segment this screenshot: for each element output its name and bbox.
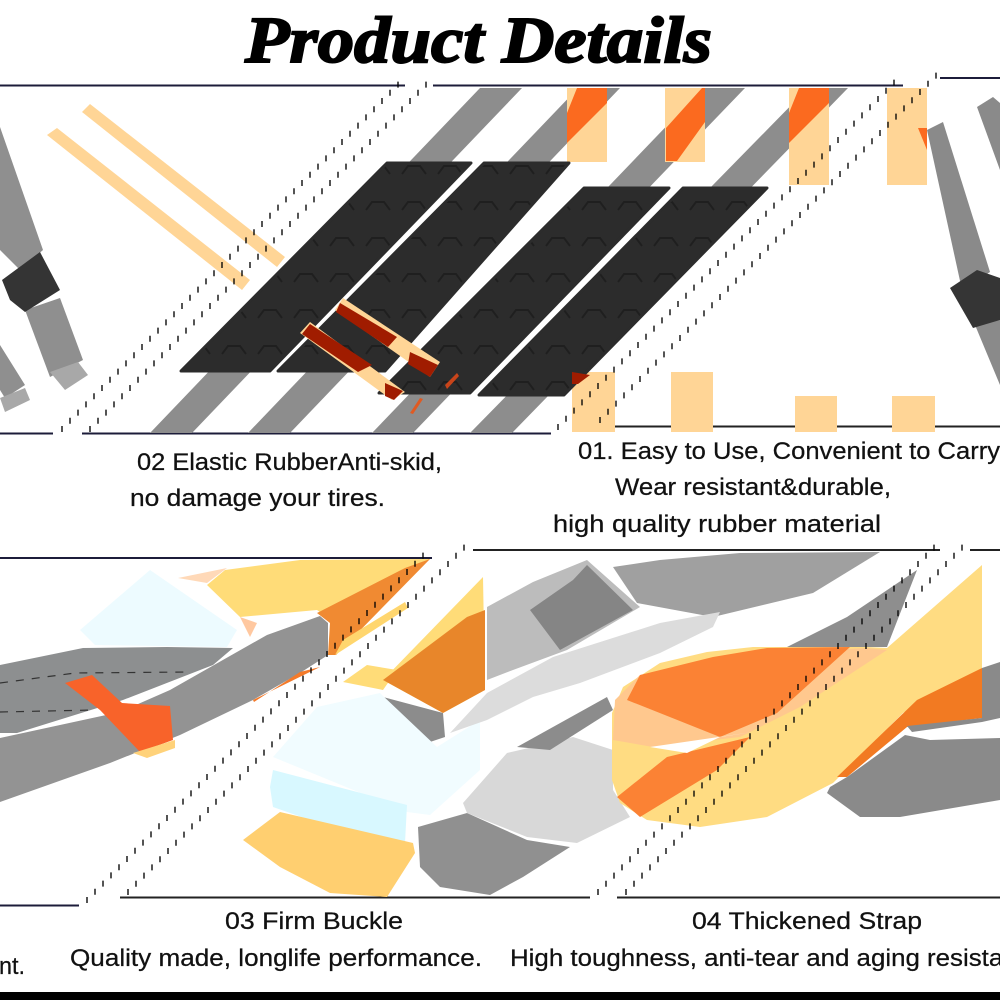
caption: thickened strap: 04 Thickened Strap [692, 908, 922, 935]
orange lower overlap [617, 737, 750, 817]
frame lines for the lower left panel [0, 550, 1000, 906]
upper buckle plate, dark part [530, 565, 633, 650]
diagonal stitched seams, bottom left [87, 545, 464, 903]
pale lower buckle body [270, 770, 407, 843]
frame lines for the top panels [0, 78, 1000, 434]
orange overlap on right strap [837, 668, 982, 777]
upper gray strap [613, 552, 880, 617]
left folded strap with buckle [0, 127, 88, 412]
title: Product Details [244, 4, 712, 77]
gold straps, bottom row [572, 372, 935, 432]
diagonal stitched seams, bottom right [598, 545, 962, 895]
stitching on webbing [0, 672, 190, 712]
yellow strap end [243, 812, 415, 897]
gray webbing lower run [0, 616, 328, 802]
pale upper body of the lower buckle [273, 693, 480, 815]
caption: elastic rubber: no damage your tires. [130, 485, 385, 512]
peach inner loop [613, 648, 887, 747]
pale buckle body [80, 570, 237, 647]
white slit in the loop [650, 732, 753, 753]
caption: easy to use [553, 438, 1000, 538]
rubber traction mats [181, 163, 767, 395]
diagonal stitched seams, top right [558, 73, 936, 430]
caption: firm buckle: 03 Firm Buckle [225, 908, 403, 935]
light buckle arm [450, 612, 720, 733]
orange overlaps on gold straps [567, 88, 927, 161]
orange strap overlap [65, 675, 173, 752]
gold straps, top row [567, 88, 927, 185]
gray webbing below buckle [418, 813, 570, 895]
caption: easy to use: high quality rubber material [553, 511, 881, 538]
upper buckle plate, light part [487, 560, 640, 680]
yellow strap loop [612, 565, 982, 827]
caption: easy to use: 01. Easy to Use, Convenient to Carry [578, 438, 1000, 465]
loose gold strips [47, 104, 285, 290]
right yellow strap wedge [383, 577, 485, 713]
yellow buckle strap [207, 559, 430, 630]
thin gray strap behind the yellow band [787, 570, 917, 647]
gray wedge below the yellow strap [383, 697, 445, 752]
orange inner strap [627, 647, 850, 737]
caption: firm buckle [70, 908, 482, 972]
panel: thickened strap photo [450, 545, 1000, 895]
panel: elastic rubber and easy to use photo [0, 73, 1000, 434]
strap bands behind the mats [150, 88, 848, 433]
panel: firm buckle photo [0, 545, 1000, 906]
gray strap right side, lower [827, 735, 1000, 817]
caption: thickened strap [510, 908, 1000, 972]
diagonal stitched seams, top left [62, 82, 426, 432]
bottom black bar [0, 992, 1000, 1000]
buckle shadow strip [517, 697, 613, 750]
caption: elastic rubber [130, 449, 442, 512]
caption: elastic rubber: 02 Elastic RubberAnti-skid, [137, 449, 442, 476]
caption: easy to use: Wear resistant&durable, [615, 474, 891, 501]
caption: firm buckle: Quality made, longlife performance. [70, 945, 482, 972]
gray strap right side, upper [907, 662, 1000, 732]
lower buckle plate [463, 737, 630, 843]
red strap overlap on the mats [300, 298, 590, 414]
gray webbing upper loop [0, 647, 233, 733]
caption: thickened strap: High toughness, anti-tear and aging resistant. [510, 945, 1000, 972]
right folded strap with buckle [927, 97, 1000, 385]
